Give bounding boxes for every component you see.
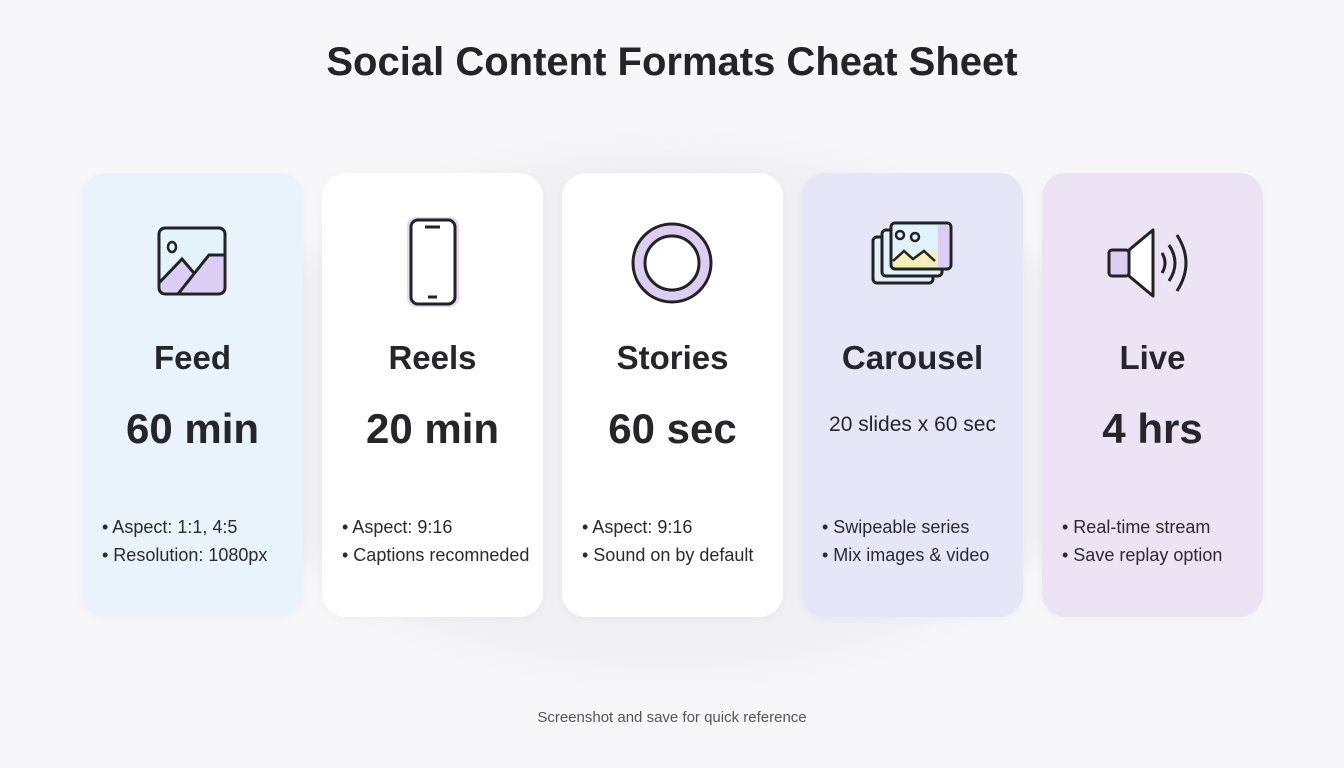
bullets: • Captions recomneded <box>342 545 529 565</box>
bullets <box>342 517 529 565</box>
bullets: • Real-time stream <box>1062 517 1210 537</box>
value: 20 min <box>366 405 499 452</box>
bullets: • Mix images & video <box>822 545 989 565</box>
heading: Live: Live <box>1119 339 1186 376</box>
bullets <box>102 517 268 565</box>
value: 4 hrs <box>1102 405 1203 452</box>
panel: carousel <box>802 173 1023 617</box>
heading: Stories: Stories <box>617 339 728 376</box>
value: 60 min <box>126 405 259 452</box>
heading: Carousel: Carousel <box>842 339 983 376</box>
bullets: • Aspect: 1:1, 4:5 <box>102 517 237 537</box>
panel: feed <box>82 173 303 617</box>
title: Social Content Formats Cheat Sheet <box>326 40 1018 84</box>
panel: live <box>1042 173 1263 617</box>
bullets: • Sound on by default <box>582 545 753 565</box>
heading: Feed: Feed <box>154 339 231 376</box>
icon: phone <box>407 217 459 307</box>
icon: image <box>158 226 226 296</box>
bullets <box>582 517 754 565</box>
bullets: • Save replay option <box>1062 545 1222 565</box>
bullets: • Aspect: 9:16 <box>582 517 692 537</box>
panel: stories <box>562 173 783 617</box>
icon: speaker <box>1108 228 1188 298</box>
bullets <box>822 517 989 565</box>
bullets: • Resolution: 1080px <box>102 545 267 565</box>
icon: ring <box>632 222 712 304</box>
heading: Reels: Reels <box>388 339 477 376</box>
footer: Screenshot and save for quick reference <box>537 709 807 726</box>
value: 60 sec <box>608 405 737 452</box>
panel: reels <box>322 173 543 617</box>
icon: stacked images <box>872 222 952 284</box>
bullets: • Swipeable series <box>822 517 969 537</box>
bullets: • Aspect: 9:16 <box>342 517 452 537</box>
bullets <box>1062 517 1222 565</box>
value: 20 slides x 60 sec <box>829 413 996 436</box>
